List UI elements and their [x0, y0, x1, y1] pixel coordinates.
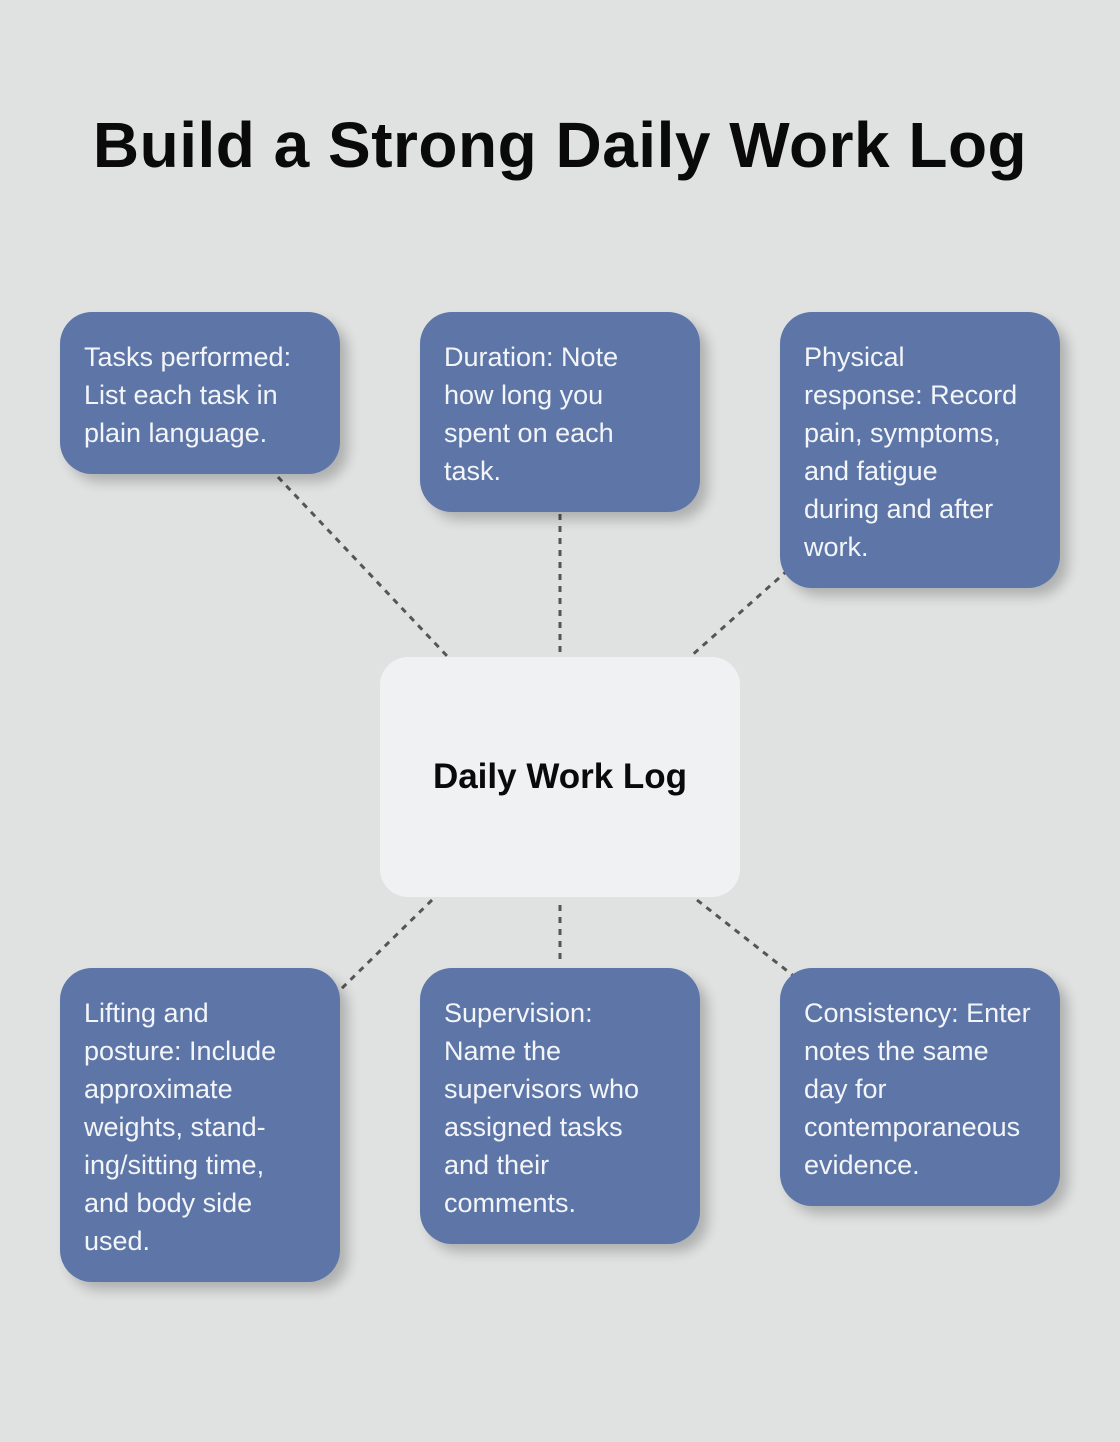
center: daily work log: Daily Work Log	[433, 757, 687, 796]
box: consistency: evidence.	[804, 1150, 920, 1180]
box: lifting and posture: weights, stand-	[84, 1112, 266, 1142]
box: supervision	[420, 968, 700, 1244]
box: lifting and posture: ing/sitting time,	[84, 1150, 264, 1180]
center: daily work log	[380, 657, 740, 897]
box: physical response: response: Record	[804, 380, 1017, 410]
box: duration: task.	[444, 456, 501, 486]
box: consistency	[780, 968, 1060, 1206]
box: lifting and posture	[60, 968, 340, 1282]
box: lifting and posture: used.	[84, 1226, 150, 1256]
box: physical response: and fatigue	[804, 456, 938, 486]
box: consistency: contemporaneous	[804, 1112, 1020, 1142]
box: physical response	[780, 312, 1060, 588]
box: consistency: notes the same	[804, 1036, 989, 1066]
box: tasks performed	[60, 312, 340, 474]
box: lifting and posture: approximate	[84, 1074, 233, 1104]
box: lifting and posture: and body side	[84, 1188, 252, 1218]
box: tasks performed: plain language.	[84, 418, 267, 448]
box: supervision: comments.	[444, 1188, 576, 1218]
box: physical response: work.	[804, 532, 869, 562]
box: tasks performed: List each task in	[84, 380, 278, 410]
box: physical response: Physical	[804, 342, 905, 372]
box: supervision: assigned tasks	[444, 1112, 623, 1142]
box: supervision: Supervision:	[444, 998, 593, 1028]
box: consistency: day for	[804, 1074, 887, 1104]
box: supervision: Name the	[444, 1036, 561, 1066]
box: physical response: during and after	[804, 494, 993, 524]
box: duration: how long you	[444, 380, 603, 410]
box: tasks performed: Tasks performed:	[84, 342, 291, 372]
box: duration: spent on each	[444, 418, 614, 448]
box: lifting and posture: posture: Include	[84, 1036, 276, 1066]
box: lifting and posture: Lifting and	[84, 998, 209, 1028]
box: supervision: supervisors who	[444, 1074, 639, 1104]
box: duration: Duration: Note	[444, 342, 618, 372]
title: Build a Strong Daily Work Log	[93, 109, 1027, 181]
box: physical response: pain, symptoms,	[804, 418, 1001, 448]
box: supervision: and their	[444, 1150, 549, 1180]
box: duration	[420, 312, 700, 512]
box: consistency: Consistency: Enter	[804, 998, 1031, 1028]
